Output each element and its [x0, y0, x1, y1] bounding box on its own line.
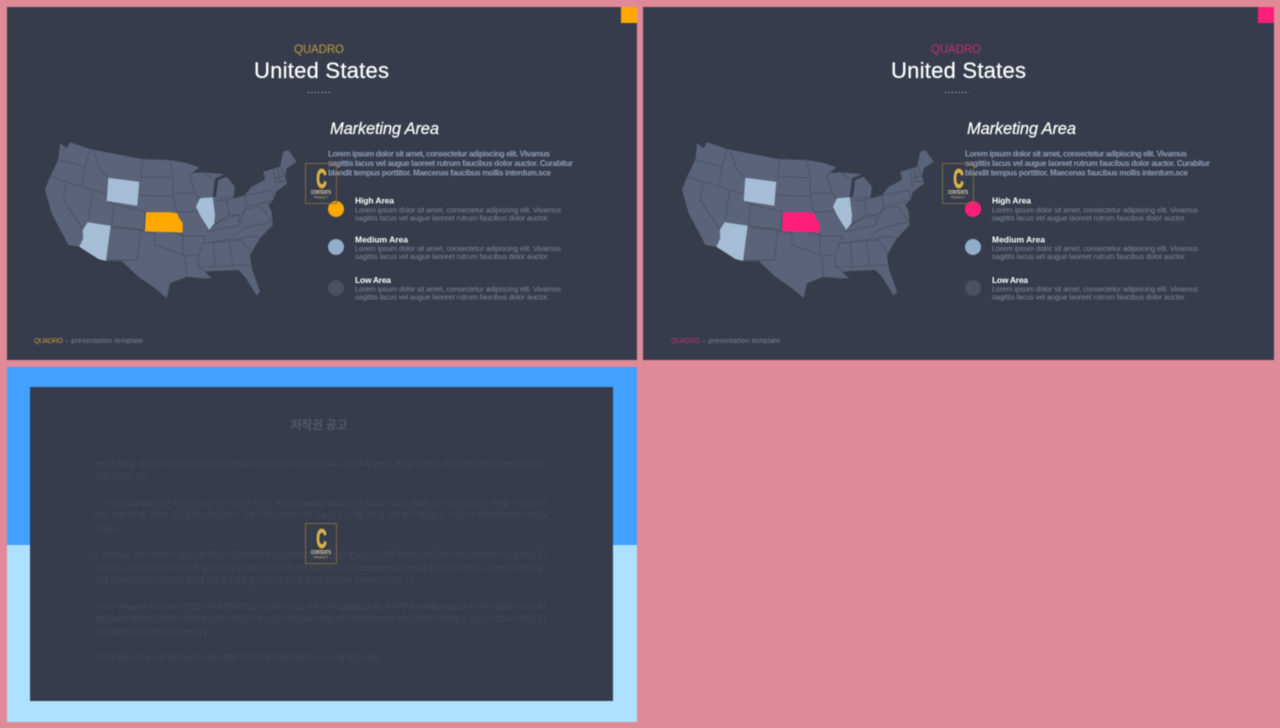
- legend: low area: Lorem ipsum dolor sit amet, consectetur adipiscing elit. Vivamus: [992, 284, 1198, 294]
- notice body: 수 있습니다.: [95, 524, 123, 534]
- state: Arizona: [716, 222, 748, 261]
- legend: medium area: sagittis lacus vel augue laoreet rutrum faucibus dolor auctor.: [355, 252, 549, 261]
- footer: QUADRO: [671, 338, 701, 345]
- legend: high area: [965, 196, 1198, 222]
- legend: low area: [965, 275, 1198, 302]
- notice title: 저작권 공고: [290, 417, 348, 432]
- panel: orange slide: [7, 7, 637, 360]
- accent square: [621, 7, 637, 23]
- legend: low area: [328, 275, 561, 302]
- map of the United States: [682, 142, 934, 298]
- legend: high area: High Area: [992, 196, 1031, 206]
- intro text: sagittis lacus vel augue laoreet rutrum faucibus dolor auctor. Curabitur: [965, 159, 1210, 168]
- intro text: Lorem ipsum dolor sit amet, consectetur adipiscing elit. Vivamus: [965, 150, 1188, 158]
- title: United States: [891, 58, 1026, 83]
- notice body: 3. 이미지(Image) & 차트(Chart): 컨텐츠 내에 포함되어 있는 이미지와 차트는 무료 이미지(pixabay.com)와 자체 제작(contentsproduct.com) 등에서 제공된 자료입니다.: [95, 601, 548, 611]
- notice body: 2. 폰트(Font): 컨텐츠 제작에 사용된 기본 폰트는 제품에 포함되지 않으며 별도의 라이선스가 필요합니다. 폰트 저작권은 해당 제작사에 있으며 확인 후 사용 바랍니다.: [95, 550, 548, 560]
- intro text: sagittis lacus vel augue laoreet rutrum faucibus dolor auctor. Curabitur: [328, 159, 573, 168]
- notice card: [30, 387, 613, 701]
- section heading: Marketing Area: [967, 120, 1076, 138]
- intro text: Lorem ipsum dolor sit amet, consectetur adipiscing elit. Vivamus: [328, 150, 551, 158]
- notice body: 불법 공유와 재판매는 금지되며 이미지를 임의로 재가공하거나 상업적 목적으로 이용할 경우 관련 법령에 따라 저작권 침해로 처벌받을 수 있으니 주의하시기 바랍니다.: [95, 614, 548, 624]
- legend: medium area: [328, 234, 561, 261]
- legend: low area: Low Area: [355, 275, 391, 285]
- state: Kansas: [782, 212, 820, 232]
- dotted divider: [308, 92, 332, 94]
- map of the United States: [45, 142, 297, 298]
- footer: – presentation template: [702, 338, 780, 345]
- legend: medium area: Lorem ipsum dolor sit amet, consectetur adipiscing elit. Vivamus: [992, 244, 1198, 253]
- legend: medium area: Medium Area: [992, 234, 1045, 244]
- watermark logo: [306, 164, 336, 204]
- footer: QUADRO: [34, 338, 64, 345]
- legend: high area: [328, 196, 561, 222]
- title: United States: [254, 58, 389, 83]
- notice body: 1. 저작권(Copyright): 모든 컨텐츠의 소유 및 저작권은 컨텐츠 제공자(Contents Product)에 귀속되며 복제 및 재배포 없이 개인 용도로만 사용할 수 있습니다.: [95, 498, 548, 508]
- footer: – presentation template: [65, 338, 143, 345]
- notice body: 전체 문서에 적용되어 있으므로 필요할 경우 별도 폰트를 구입하거나 다른 폰트로 변경하여 사용하시기 바랍니다.: [95, 575, 415, 585]
- eyebrow: QUADRO: [294, 44, 344, 56]
- legend: low area: Lorem ipsum dolor sit amet, consectetur adipiscing elit. Vivamus: [355, 284, 561, 294]
- intro text: blandit tempus porttitor. Maecenas faucibus mollis interdum.sce: [328, 168, 552, 178]
- notice body: 라이선스 공유와 재배포는 허용되지 않으며 사용 범위를 확인하신 후 폰트 제공사의 사이트(contentsproduct.com)를 참고하시어 필요시 구매하시기 바랍니다.: [95, 563, 548, 573]
- state: Illinois: [196, 197, 215, 230]
- intro text: blandit tempus porttitor. Maecenas faucibus mollis interdum.sce: [965, 168, 1189, 178]
- eyebrow: QUADRO: [931, 44, 981, 56]
- panel: pink slide: [643, 7, 1274, 360]
- notice body: 이미지를 변경하여 사용하시기 바랍니다.: [95, 627, 208, 637]
- notice body: [95, 459, 548, 663]
- legend: high area: sagittis lacus vel augue laoreet rutrum faucibus dolor auctor.: [355, 214, 549, 222]
- legend: high area: Lorem ipsum dolor sit amet, consectetur adipiscing elit. Vivamus: [355, 206, 561, 214]
- state: Illinois: [833, 197, 852, 230]
- legend: low area: sagittis lacus vel augue laoreet rutrum faucibus dolor auctor.: [355, 292, 549, 302]
- intro text: [328, 150, 573, 178]
- notice body: 것을 의미합니다.: [95, 471, 147, 481]
- legend: low area: Low Area: [992, 275, 1028, 285]
- panel: copyright notice: [7, 367, 637, 722]
- blue backdrop bottom: [7, 545, 637, 722]
- state: Wyoming: [744, 178, 776, 206]
- legend: medium area: sagittis lacus vel augue laoreet rutrum faucibus dolor auctor.: [992, 252, 1186, 261]
- legend: medium area: Lorem ipsum dolor sit amet, consectetur adipiscing elit. Vivamus: [355, 244, 561, 253]
- state: Arizona: [79, 222, 111, 261]
- notice body: 컨텐츠 제품 라이선스에 대한 자세한 내용은 홈페이지 하단에 기재된 컨텐츠 라이선스를 참고하세요.: [95, 653, 382, 663]
- watermark logo: [942, 164, 974, 204]
- notice body: 컨텐츠 제품을 사용하기 전에 다음의 법적인 조항들을 주의깊게 읽어 주시기 바랍니다. 귀하가 이 컨텐츠 제품을 사용하는 것은 아래의 계약 조항에 동의하시는: [95, 459, 548, 469]
- state: Wyoming: [107, 178, 139, 206]
- state: Kansas: [145, 212, 183, 232]
- accent square: [1258, 7, 1274, 23]
- notice body: 배포, 판매 행위를 금하며 모든 권리는 저작권법과 국제 저작권 조약에 의해 보호됩니다. 이를 위반할 경우 법적 책임을 질 수 있으며 관련 법령에 따라 처벌될: [95, 510, 548, 520]
- legend: medium area: Medium Area: [355, 234, 408, 244]
- blue backdrop top: [7, 367, 637, 545]
- watermark logo: [306, 524, 336, 564]
- legend: medium area: [965, 234, 1198, 261]
- section heading: Marketing Area: [330, 120, 439, 138]
- dotted divider: [945, 92, 969, 94]
- intro text: [965, 150, 1210, 178]
- legend: high area: Lorem ipsum dolor sit amet, consectetur adipiscing elit. Vivamus: [992, 206, 1198, 214]
- legend: low area: sagittis lacus vel augue laoreet rutrum faucibus dolor auctor.: [992, 292, 1186, 302]
- legend: high area: High Area: [355, 196, 394, 206]
- legend: high area: sagittis lacus vel augue laoreet rutrum faucibus dolor auctor.: [992, 214, 1186, 222]
